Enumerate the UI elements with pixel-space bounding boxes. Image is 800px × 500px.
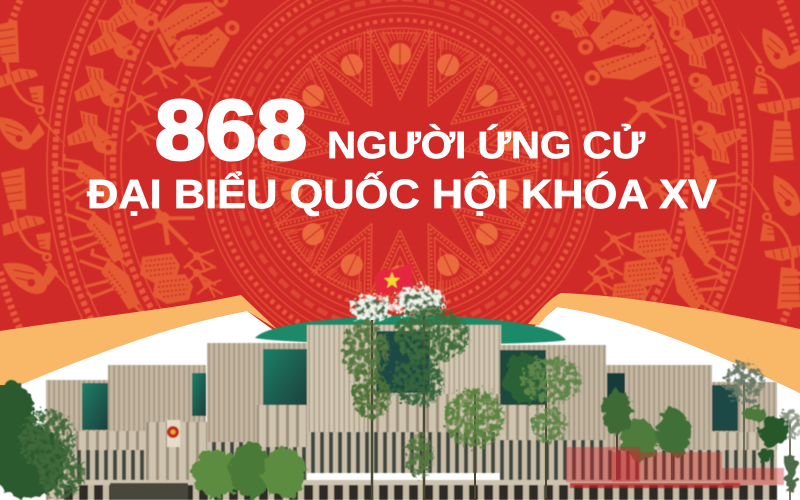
right block 3 [500, 345, 606, 441]
right orange band [528, 293, 800, 393]
flag [374, 263, 413, 296]
national emblem [167, 420, 180, 447]
crown shadows [354, 290, 442, 318]
left block 2 [108, 365, 206, 451]
white-flowering tree crowns [350, 286, 447, 322]
flag star [384, 272, 400, 288]
far right trees [725, 362, 800, 500]
left motifs [0, 0, 246, 322]
central trees [342, 307, 470, 500]
crown blossoms [350, 286, 447, 322]
far left block [46, 380, 108, 432]
central star wedges [260, 28, 540, 302]
subtitle line 2: ĐẠI BIỂU QUỐC HỘI KHÓA XV [87, 170, 718, 217]
subtitle line 1: NGƯỜI ỨNG CỬ [327, 123, 645, 167]
far right block [712, 382, 777, 434]
big number 868: 868 [155, 83, 307, 177]
green dome roof [255, 315, 566, 344]
left tree cluster [0, 381, 86, 498]
right block 2 [606, 365, 712, 451]
left orange band [0, 295, 278, 385]
white sky [0, 307, 800, 500]
drum rings [0, 0, 800, 364]
low trees in front of left wing [192, 442, 306, 498]
central block [307, 325, 501, 433]
sky and orange band [0, 293, 800, 500]
red watermark [566, 447, 784, 488]
bronze drum pattern [0, 0, 800, 364]
trees [0, 307, 800, 500]
title text [87, 83, 718, 217]
right motifs [549, 0, 800, 326]
left block 3 [207, 343, 307, 443]
colonnade tiers [46, 394, 777, 500]
National Assembly building [46, 315, 777, 500]
right centre trees [445, 352, 691, 500]
